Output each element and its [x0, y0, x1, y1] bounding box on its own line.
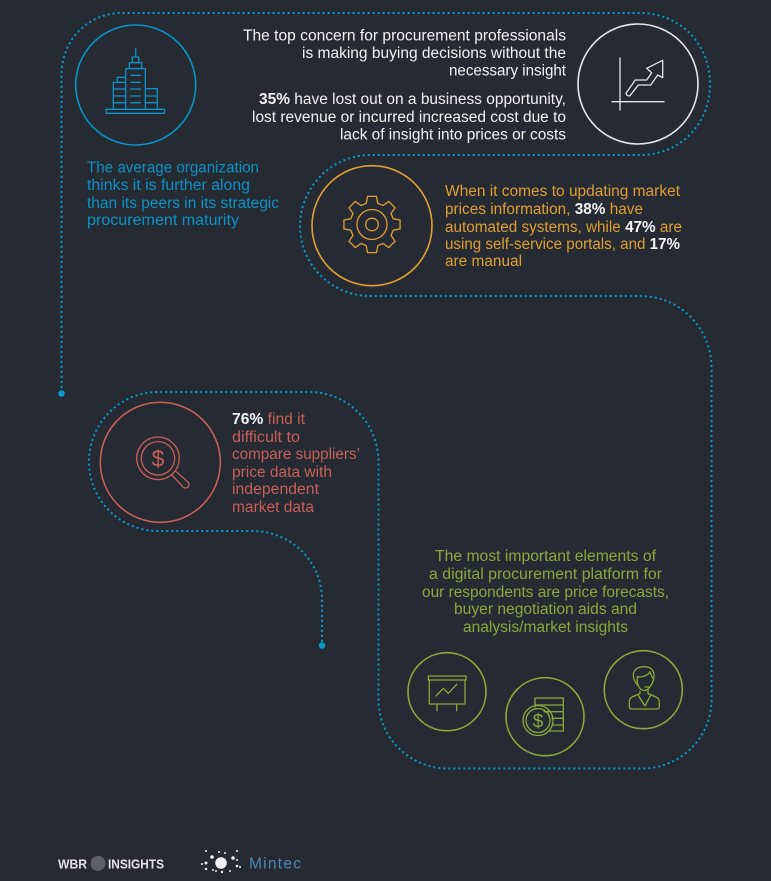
text: market prices: are manual [445, 253, 522, 270]
icon: magnifying glass with dollar [100, 402, 220, 522]
text: digital procurement platform: buyer negotiation aids and [454, 601, 637, 618]
text: digital procurement platform: analysis/market insights [463, 619, 628, 636]
logo: WBR Insights [58, 856, 164, 872]
text: digital procurement platform: The most important elements of [435, 548, 657, 565]
text: average organization [87, 160, 279, 229]
text: digital procurement platform [422, 548, 669, 636]
text: top concern: lost revenue or incurred increased cost due to [252, 109, 566, 126]
text: 76% find it difficult: difficult to [232, 429, 300, 446]
text: market prices: automated systems, while 47% are [445, 219, 682, 236]
text: top concern [243, 28, 567, 144]
text: average organization: The average organization [87, 160, 259, 176]
icon: presentation board [408, 653, 486, 731]
dotted connector path [58, 13, 712, 768]
text: market prices: using self-service portals, and 17% [445, 236, 680, 253]
text: average organization: than its peers in its strategic [87, 195, 279, 212]
text: average organization: thinks it is further along [87, 177, 250, 194]
logo: WBR Insights: INSIGHTS [108, 856, 164, 872]
text: 76% find it difficult: price data with [232, 464, 332, 481]
text: 76% find it difficult: market data [232, 499, 314, 516]
icon: support agent [604, 651, 682, 729]
text: digital procurement platform: a digital procurement platform for [429, 566, 662, 583]
text: average organization: procurement maturity [87, 212, 239, 229]
text: 76% find it difficult: independent [232, 481, 320, 498]
text: 76% find it difficult [232, 411, 360, 516]
icon: rising chart [578, 24, 698, 144]
text: top concern: necessary insight [449, 62, 567, 80]
icon: office buildings [76, 25, 196, 145]
icon: coins: $ [533, 712, 544, 732]
text: top concern: lack of insight into prices or costs [340, 126, 566, 144]
text: top concern: is making buying decisions without the [302, 45, 566, 62]
text: market prices [445, 183, 682, 270]
text: top concern: 35% have lost out on a business opportunity, [259, 91, 566, 108]
text: digital procurement platform: our respondents are price forecasts, [422, 584, 669, 601]
icon: gear [312, 166, 432, 286]
text: 76% find it difficult: compare suppliers’ [232, 446, 360, 463]
logo: WBR Insights: WBR [58, 856, 88, 872]
text: 76% find it difficult: 76% find it [232, 411, 306, 428]
logo: Mintec [201, 850, 301, 873]
text: top concern: The top concern for procurement professionals [243, 28, 566, 44]
text: market prices: prices information, 38% have [445, 201, 643, 218]
icon: coins [506, 678, 584, 756]
logo: Mintec: Mintec [249, 856, 301, 872]
icon: magnifying glass with dollar: $ [152, 446, 165, 472]
text: market prices: When it comes to updating market [445, 183, 681, 200]
